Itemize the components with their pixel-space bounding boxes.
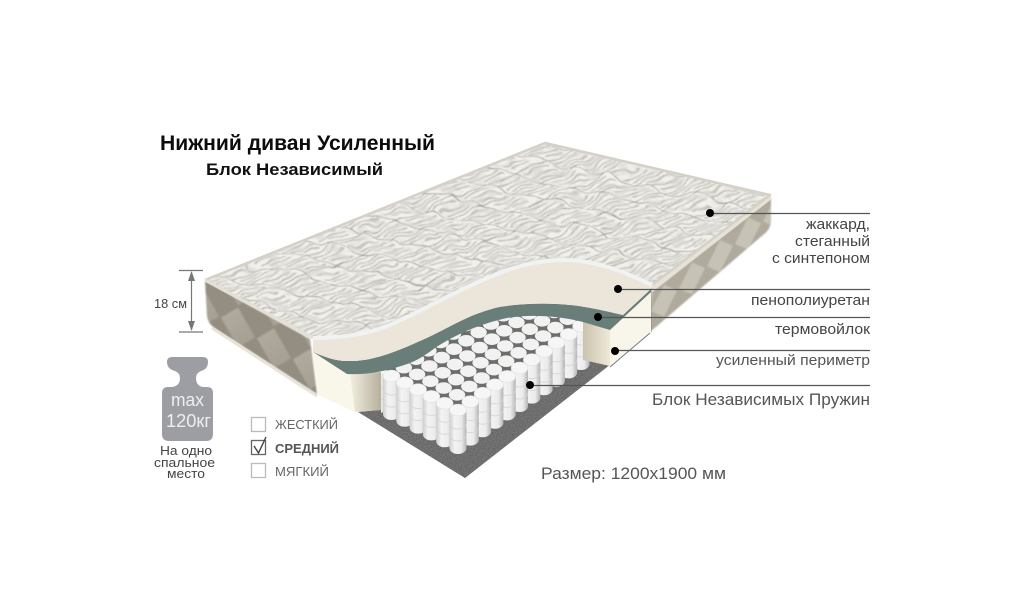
callout: jacquard: стеганный bbox=[795, 233, 870, 250]
front spring rows bbox=[370, 320, 590, 454]
weight limit icon: 120кг bbox=[166, 411, 211, 431]
firmness selector bbox=[252, 417, 339, 479]
thermal felt layer bbox=[313, 288, 652, 374]
perimeter foam left bbox=[313, 353, 381, 412]
weight note: На одно bbox=[160, 443, 212, 458]
inner spring tops bbox=[396, 316, 576, 401]
weight limit icon bbox=[162, 357, 213, 441]
callout: polyurethane foam bbox=[614, 285, 870, 309]
subtitle: Блок Независимый bbox=[206, 160, 383, 179]
callout: jacquard: жаккард, bbox=[806, 216, 870, 233]
option: hard: ЖЕСТКИЙ bbox=[275, 417, 338, 432]
perimeter foam right bbox=[583, 292, 651, 367]
callout: pocket spring block bbox=[526, 381, 870, 409]
callout: polyurethane foam: пенополиуретан bbox=[751, 292, 870, 309]
pocket springs bbox=[381, 316, 590, 454]
callout: pocket spring block: Блок Независимых Пружин bbox=[652, 390, 870, 409]
callout: thermal felt: термовойлок bbox=[775, 321, 870, 338]
weight limit icon: max bbox=[171, 390, 204, 410]
spring backing bbox=[383, 305, 582, 412]
mattress illustration bbox=[175, 142, 772, 478]
left quilted side bbox=[205, 281, 317, 396]
weight note: спальное bbox=[154, 455, 215, 470]
title: Нижний диван Усиленный bbox=[160, 132, 435, 155]
height dimension bbox=[154, 270, 203, 332]
callout: reinforced perimeter: усиленный периметр bbox=[716, 352, 870, 369]
weight note bbox=[154, 443, 215, 481]
height dimension: 18 см bbox=[154, 296, 187, 311]
quilted jacquard top bbox=[204, 142, 772, 340]
weight note: место bbox=[167, 466, 205, 481]
title bbox=[160, 132, 435, 179]
callout: jacquard bbox=[706, 209, 870, 267]
option: medium checked: СРЕДНИЙ bbox=[275, 441, 339, 456]
option: soft: МЯГКИЙ bbox=[275, 464, 329, 479]
polyurethane foam layer bbox=[313, 260, 652, 361]
size note: Размер: 1200x1900 мм bbox=[541, 464, 726, 483]
callout: jacquard: с синтепоном bbox=[772, 250, 870, 267]
right quilted side bbox=[650, 197, 771, 332]
callout: reinforced perimeter bbox=[611, 347, 870, 369]
felt base bbox=[358, 360, 611, 478]
callout: thermal felt bbox=[594, 313, 870, 338]
